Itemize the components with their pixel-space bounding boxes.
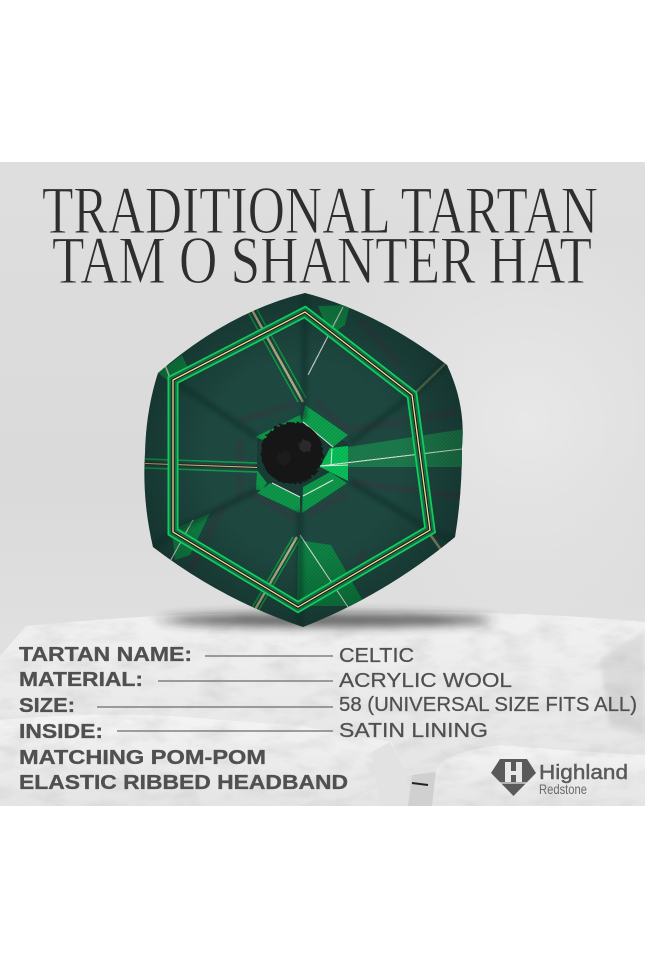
spec labels: SIZE:	[19, 695, 75, 717]
pom-pom	[261, 422, 323, 484]
dark bands	[190, 320, 460, 598]
spec values	[339, 645, 637, 742]
twill texture	[144, 296, 462, 608]
hat shadow	[163, 613, 493, 627]
spec values: 58 (UNIVERSAL SIZE FITS ALL)	[339, 694, 637, 716]
logo icon	[491, 759, 536, 796]
spec values: ACRYLIC WOOL	[339, 670, 512, 692]
spec values: SATIN LINING	[339, 720, 488, 742]
main octagon stripes	[173, 312, 430, 607]
center white trim	[272, 422, 348, 497]
photo panel background	[0, 162, 645, 806]
cross stripes	[145, 307, 462, 613]
spec labels: INSIDE:	[19, 721, 103, 743]
infographic	[0, 162, 645, 806]
spec labels: TARTAN NAME:	[19, 644, 192, 666]
title	[42, 172, 598, 298]
cloth base	[140, 288, 470, 633]
center hollow around pom-pom	[257, 420, 348, 507]
spec labels	[19, 644, 348, 794]
bright green blocks	[158, 305, 464, 606]
spec labels: ELASTIC RIBBED HEADBAND	[19, 772, 348, 794]
spec values: CELTIC	[339, 645, 414, 667]
spec labels: MATCHING POM-POM	[19, 747, 266, 769]
spec labels: MATERIAL:	[19, 669, 143, 691]
logo: Highland Redstone: Highland	[539, 762, 628, 784]
leader lines	[97, 656, 333, 731]
stone plinth	[0, 612, 645, 806]
hat	[140, 288, 470, 633]
logo: Highland Redstone: Redstone	[539, 781, 587, 797]
logo: Highland Redstone	[491, 759, 628, 797]
pleat folds	[152, 296, 455, 625]
